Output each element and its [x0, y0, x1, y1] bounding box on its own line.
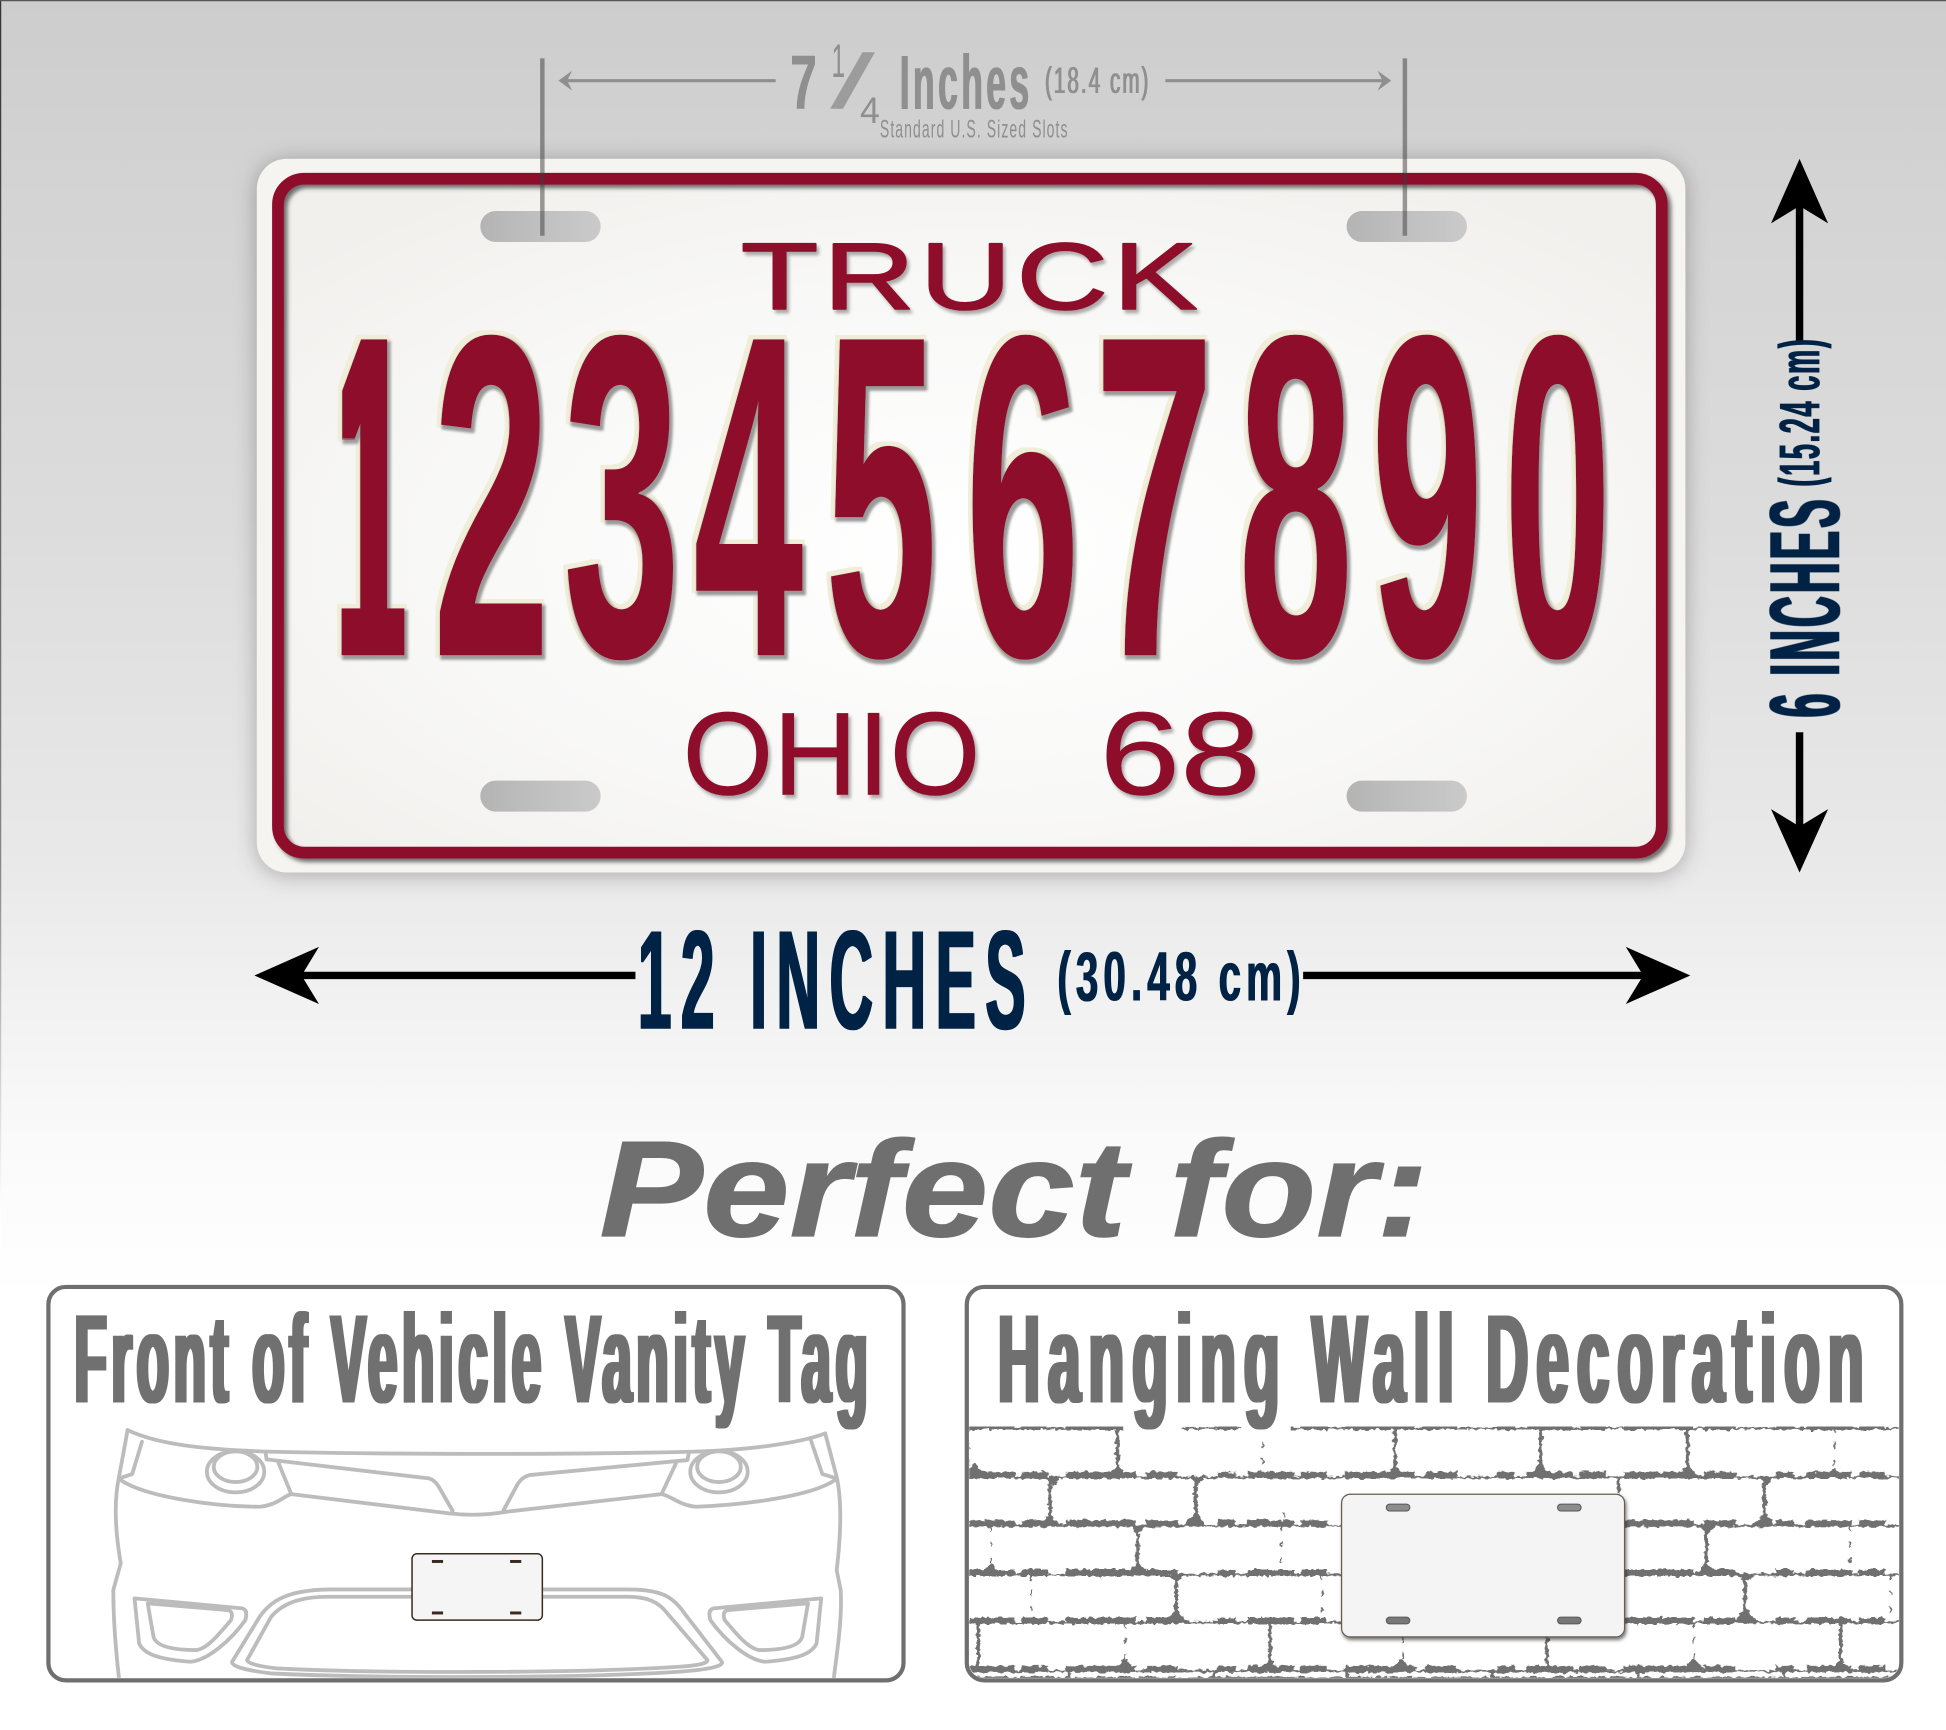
infographic canvas: Front of Vehicle Vanity Tag [74, 1287, 872, 1429]
plate text: OHIO 68: OHIO [683, 687, 980, 819]
mini plate on wall [1342, 1494, 1625, 1637]
plate body [257, 159, 1685, 872]
plate number digits: 6 [966, 240, 1080, 753]
plate number digits: 9 [1371, 240, 1483, 753]
plate number digits: 1 [341, 240, 401, 753]
plate number digits: 2 [433, 240, 550, 753]
width label: 12 INCHES [638, 901, 1035, 1059]
width label: (30.48 cm) [1057, 937, 1306, 1015]
width dimension: 12 inches [254, 901, 1690, 1059]
height dimension: 6 inches: (15.24 cm) [1768, 338, 1832, 486]
slot spacing dimension [558, 34, 1391, 144]
arrow: width left [254, 947, 635, 1004]
plate red border [278, 179, 1662, 853]
plate number digits: 4 [694, 240, 804, 753]
car front line drawing [113, 1430, 841, 1678]
arrow: slot width right [1165, 71, 1391, 91]
dimension label: 7 1/4 inches: 4 [860, 89, 880, 131]
height dimension: 6 inches [1749, 159, 1861, 872]
dimension label: 7 1/4 inches: Inches [900, 40, 1033, 126]
plate number digits: 8 [1239, 240, 1353, 753]
plate face [278, 179, 1662, 853]
plate number digits: 7 [1095, 240, 1214, 753]
mini plate on car [412, 1554, 542, 1620]
plate text: TRUCK: TRUCK [741, 224, 1203, 329]
plate number digits: 5 [825, 240, 937, 753]
slot guide line left [541, 58, 544, 236]
plate text: OHIO 68: 68 [1100, 687, 1261, 819]
dimension label: 7 1/4 inches: 1 [832, 34, 845, 87]
arrow: height down [1771, 732, 1828, 872]
dimension label: 7 1/4 inches [791, 34, 1150, 144]
dimension label: 7 1/4 inches: 7 [791, 40, 817, 126]
brick wall [963, 1419, 1903, 1681]
arrow: width right [1303, 947, 1690, 1004]
dimension label: 7 1/4 inches: (18.4 cm) [1045, 59, 1150, 101]
height label: 6 INCHES [1749, 496, 1861, 717]
slot guide line right [1403, 58, 1407, 236]
panel: front of vehicle [48, 1287, 903, 1680]
mounting slot top left [480, 211, 601, 242]
mounting slot top right [1347, 211, 1467, 242]
plate number digits [341, 240, 1611, 753]
panel background and frame [967, 1287, 1901, 1680]
panel: hanging wall decoration [963, 1287, 1903, 1681]
mounting slot bottom left [480, 781, 601, 812]
arrow: slot width left [558, 71, 776, 91]
dimension label: 7 1/4 inches: Standard U.S. Sized Slots [880, 117, 1069, 144]
license plate [257, 159, 1685, 872]
plate number digits: 3 [563, 240, 680, 753]
arrow: height up [1771, 159, 1828, 341]
license plate: 0 [1504, 240, 1611, 753]
panel background and frame [48, 1287, 903, 1680]
heading: Perfect for: Perfect for: [599, 1112, 1428, 1265]
plate text: OHIO 68 [683, 687, 1261, 819]
dimension label: 7 1/4 inches: / [830, 39, 876, 125]
mounting slot bottom right [1347, 781, 1467, 812]
